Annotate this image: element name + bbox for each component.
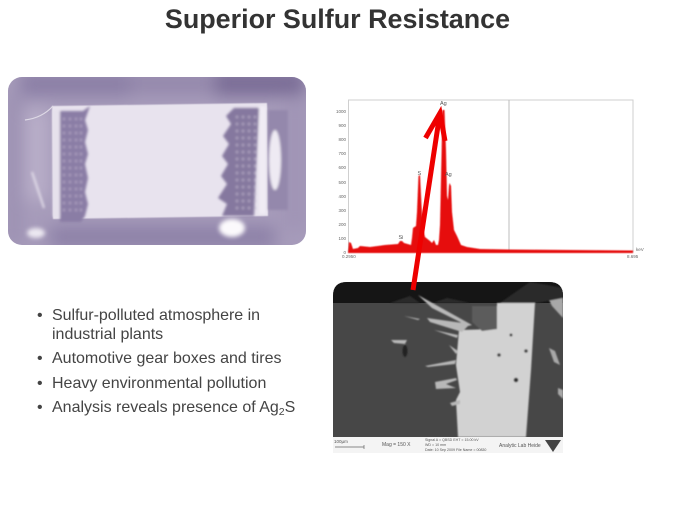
scale bar text: Signal A = QBSD EHT = 15.00 kV [425,438,479,442]
silver terminal [456,303,535,437]
bullet 2: Automotive gear boxes and tires [52,350,281,367]
right side details [548,293,563,399]
peak labels [398,101,452,241]
bullet 1: • [37,307,43,324]
scale bar text: Date: 10 Sep 2009 File Name = 00830 [425,448,486,452]
bullet list [37,307,295,418]
scale bar text: Analytic Lab Heide [499,443,541,449]
photo: SEM cross-section [333,282,563,453]
bullet 4: S [285,399,295,416]
scale bar text [334,438,541,452]
bullet 1: Sulfur-polluted atmosphere in [52,307,260,324]
scale bar text: 100µm [334,439,348,444]
x-axis labels: 8.695 [627,254,639,259]
y-axis labels: 900 [338,123,346,128]
title: Superior Sulfur Resistance [165,4,510,34]
bullet 3: Heavy environmental pollution [52,375,266,392]
y-axis labels: 800 [338,137,346,142]
bullet 3: • [37,375,43,392]
scale bar strip [333,437,563,453]
y-axis labels: 100 [338,236,346,241]
photo: resistor chip with silver sulfide growth [8,70,307,248]
y-axis labels: 300 [338,208,346,213]
peak labels: Ag [440,101,447,107]
bullet 2: • [37,350,43,367]
left silver terminal [53,106,90,222]
dark wedge [472,306,497,331]
peak labels: Si [398,235,403,241]
bullet 4: Analysis reveals presence of Ag [52,399,279,416]
peak labels: Ag [445,172,452,178]
x-axis labels [342,247,644,259]
y-axis labels [336,109,346,255]
bullet 4: • [37,399,43,416]
y-axis labels: 0 [343,250,346,255]
x-axis labels: 0.2950 [342,254,356,259]
plot frame [348,100,633,252]
y-axis labels: 400 [338,194,346,199]
dendrites [391,295,472,406]
peak labels: S [418,171,422,177]
logo [545,440,561,452]
bullet 1 [37,307,260,343]
scale bar text: WD = 10 mm [425,443,446,447]
right silver terminal [218,106,288,216]
bullet 1: industrial plants [52,326,163,343]
chart: EDS spectrum [336,100,644,259]
y-axis labels: 200 [338,222,346,227]
scale bar text: Mag = 150 X [382,442,411,448]
bullet 4: 2 [279,406,285,418]
debris and glare [25,106,245,238]
y-axis labels: 1000 [336,109,346,114]
dark pores [514,378,518,382]
spectrum area [348,110,633,253]
x-axis labels: keV [636,247,644,252]
y-axis labels: 600 [338,165,346,170]
chip body [52,103,268,219]
arrow: red pointer to Ag peak [413,113,445,290]
y-axis labels: 700 [338,151,346,156]
y-axis labels: 500 [338,180,346,185]
